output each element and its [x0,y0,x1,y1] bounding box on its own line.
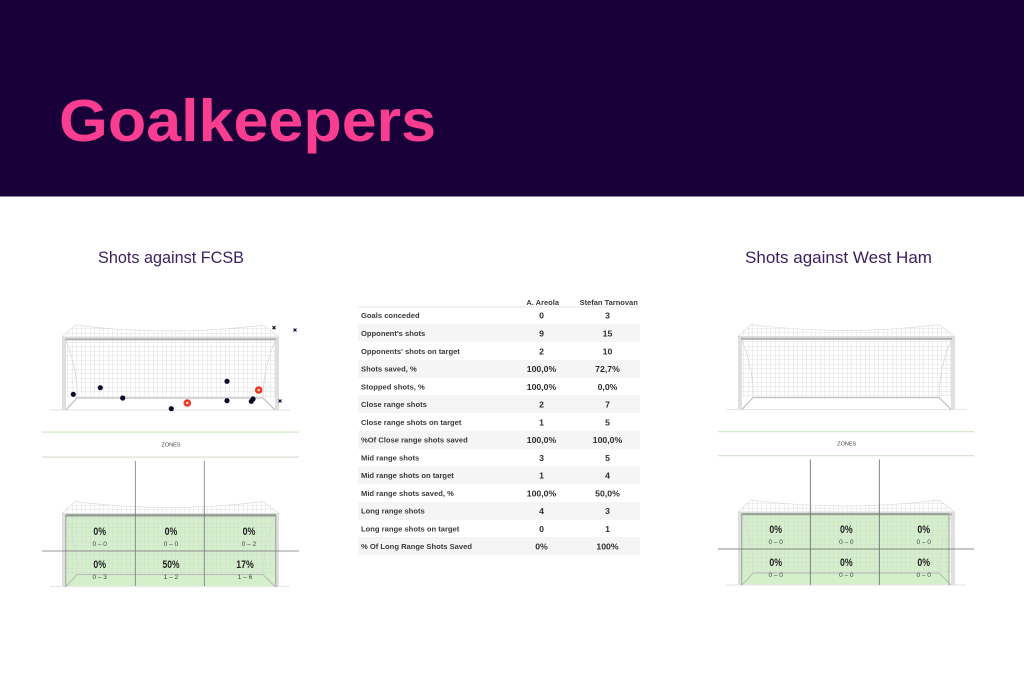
table rows: 4 [605,470,610,480]
zone values: 50% [162,559,180,571]
heading: shots against FCSB: Shots against FCSB [98,248,244,267]
table rows: 0 [539,310,544,320]
table rows: Shots saved, % [361,364,417,374]
goal diagram with shot markers [50,325,296,411]
shots off target [272,326,296,402]
zone values: 0 – 0 [916,572,931,579]
zone values: 0 – 0 [164,541,179,548]
table rows: Opponent's shots [361,329,425,338]
table rows: Mid range shots saved, % [361,489,454,498]
table rows: 1 [539,418,544,428]
table rows: 5 [605,453,610,463]
zone values: 0% [243,526,256,538]
zone values: 0% [93,526,106,538]
table rows: 5 [605,418,610,428]
zones divider: ZONES [837,442,857,448]
table rows: 100,0% [527,435,557,445]
table rows: 100,0% [527,488,557,498]
table header: Stefan Tarnovan [580,298,638,307]
table rows: 10 [603,346,612,356]
table header [526,298,638,307]
table rows: 1 [539,470,544,480]
table rows: 50,0% [595,488,620,498]
zone values: 0% [917,524,930,536]
zone values: 17% [236,559,254,571]
zones goal chart [718,460,974,585]
table rows: Stopped shots, % [361,382,425,392]
table rows: 3 [539,453,544,463]
table rows: Mid range shots on target [361,471,454,480]
zone values: 0 – 0 [768,572,783,579]
table rows: 0 [539,524,544,534]
table rows: 7 [605,400,610,410]
table rows: 100,0% [593,435,623,445]
goal diagram [726,324,966,410]
zones goal chart [42,461,299,587]
heading: shots against West Ham: Shots against West Ham [745,248,932,267]
zone values: 0% [93,559,106,571]
table rows: 3 [605,310,610,320]
title: Goalkeepers [59,88,436,154]
table rows: Opponents' shots on target [361,347,460,356]
zone values: 0 – 3 [92,574,107,581]
zone values: 0% [165,526,178,538]
zone values: 0 – 0 [839,572,854,579]
zone values [768,524,931,579]
table rows: 2 [539,346,544,356]
zone values: 0 – 2 [242,541,257,548]
table rows: 1 [605,524,610,534]
table rows: % Of Long Range Shots Saved [361,542,472,551]
table rows: 72,7% [595,364,620,374]
panel: goalkeeper stats table [358,298,640,555]
table header: A. Areola [526,298,560,307]
zones divider: ZONES [162,442,181,448]
table rows: 4 [539,506,544,516]
table rows: 0,0% [598,382,618,392]
zone values: 1 – 6 [238,574,253,581]
panel: shots against West Ham [718,248,974,585]
table rows: 0% [535,542,548,552]
zone values: 0% [840,557,853,569]
table rows: 2 [539,400,544,410]
zone values: 0 – 0 [916,539,931,546]
table rows: Mid range shots [361,454,419,462]
zone values: 0 – 0 [839,539,854,546]
table rows: 3 [605,506,610,516]
zone values: 1 – 2 [164,574,179,581]
zone values [92,526,257,581]
table rows: Goals conceded [361,311,420,320]
table rows: Close range shots on target [361,418,462,427]
goals conceded markers [184,386,262,407]
zone values: 0% [769,524,782,536]
zone values: 0% [769,557,782,569]
table rows: 9 [539,328,544,338]
table rows: 100,0% [527,382,557,392]
table rows: %Of Close range shots saved [361,436,468,444]
zone values: 0 – 0 [92,541,107,548]
zone values: 0% [917,557,930,569]
panel: shots against FCSB [42,248,299,587]
zone values: 0% [840,524,853,536]
table rows: 100,0% [527,364,557,374]
table rows: 100% [596,542,619,552]
table rows [361,310,623,552]
table rows: Close range shots [361,400,427,409]
table rows: Long range shots on target [361,524,460,534]
table row stripes [358,324,640,555]
zone values: 0 – 0 [768,539,783,546]
table rows: 15 [603,328,612,338]
shots on target [71,379,256,411]
header banner [0,0,1024,196]
table rows: Long range shots [361,506,425,516]
